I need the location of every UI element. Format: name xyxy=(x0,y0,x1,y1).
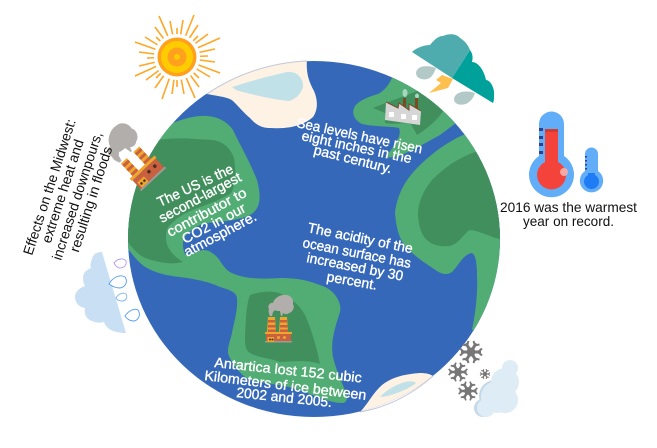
mercury xyxy=(584,173,599,189)
mercury xyxy=(537,129,566,189)
text: warmest year: year on record. xyxy=(523,213,614,229)
cloud dark half xyxy=(452,50,494,103)
factory base xyxy=(265,332,292,334)
chimneys xyxy=(403,98,418,109)
text: Midwest effects: increased downpours, xyxy=(49,130,105,262)
ticks xyxy=(585,156,587,170)
text: sea levels xyxy=(295,114,424,176)
snowflake 1 xyxy=(460,341,482,363)
cloud shadow xyxy=(474,380,511,417)
land: South America dark xyxy=(245,292,320,364)
ocean xyxy=(128,61,500,417)
text: ocean acidity: The acidity of the xyxy=(306,219,415,256)
raindrops xyxy=(416,66,475,105)
chimneys xyxy=(121,147,152,177)
thermometer body xyxy=(529,112,574,197)
smoke puffs xyxy=(402,89,408,97)
icon: rain cloud xyxy=(75,252,139,333)
land: Eurasia dark xyxy=(418,152,500,246)
icon: small thermometer xyxy=(580,148,603,192)
thermometer body xyxy=(580,148,603,192)
text: US contributor: The US is the xyxy=(155,160,236,210)
globe rim xyxy=(207,61,433,412)
land: Arctic light xyxy=(353,78,456,158)
text: Antartica ice: Kilometers of ice between xyxy=(204,367,367,403)
text: Midwest effects: extreme heat and xyxy=(38,137,87,245)
icon: large thermometer xyxy=(529,112,574,197)
sun rays xyxy=(135,15,220,99)
globe xyxy=(128,60,500,417)
ice lake: north xyxy=(232,72,303,101)
text: ocean acidity: increased by 30 xyxy=(305,249,405,284)
text: US contributor: CO2 in our xyxy=(179,199,249,247)
cloud light half xyxy=(412,34,470,78)
text: ocean acidity: percent. xyxy=(325,268,378,293)
sun disc xyxy=(158,38,196,76)
text: warmest year xyxy=(500,199,637,229)
text: Midwest effects: resulting in floods xyxy=(66,144,115,254)
text: Midwest effects xyxy=(20,117,115,262)
highlight xyxy=(560,168,568,176)
text: US contributor: contributor to xyxy=(164,184,249,240)
text: Antartica ice: Antartica lost 152 cubic xyxy=(214,354,363,385)
icon: storm cloud xyxy=(412,34,494,105)
text: sea levels: eight inches in the xyxy=(300,127,413,166)
text: warmest year: 2016 was the warmest xyxy=(500,199,637,215)
icon: factory in South America xyxy=(265,295,294,342)
icon: factory near Arctic xyxy=(385,89,421,125)
ice cap: south xyxy=(360,373,433,412)
icon: snow cloud and flakes xyxy=(449,341,519,417)
icon: factory in North America xyxy=(97,118,168,191)
smoke xyxy=(268,295,294,316)
text: Antartica ice: 2002 and 2005. xyxy=(236,384,333,410)
ray gap xyxy=(154,34,200,80)
text: US contributor: second-largest xyxy=(156,169,244,226)
land: Arctic dark xyxy=(373,90,443,135)
cloud xyxy=(75,252,126,333)
land: North America dark xyxy=(128,138,236,264)
raindrops xyxy=(109,259,139,321)
icon: sun xyxy=(135,15,220,99)
text: sea levels: Sea levels have risen xyxy=(295,114,424,157)
text: US contributor: atmosphere. xyxy=(181,208,259,260)
land: North America light xyxy=(115,116,347,403)
text: US contributor xyxy=(155,160,259,260)
smoke xyxy=(98,118,144,164)
text: ocean acidity xyxy=(301,219,415,293)
text: Antartica ice xyxy=(204,354,367,410)
text: Midwest effects: Effects on the Midwest: xyxy=(20,117,79,257)
text: ocean acidity: ocean surface has xyxy=(301,234,412,271)
chimneys xyxy=(267,317,288,332)
factory windows xyxy=(389,112,417,120)
snowflake 4 xyxy=(480,369,490,379)
continents and ice caps xyxy=(128,62,500,412)
lightning bolt xyxy=(429,75,453,93)
snowflake 3 xyxy=(459,382,477,400)
land: Eurasia light xyxy=(395,134,500,330)
ticks xyxy=(539,128,543,154)
ice lake: south xyxy=(380,381,416,397)
factory base xyxy=(130,156,157,181)
factory building xyxy=(385,102,421,125)
snowflake 2 xyxy=(449,363,467,381)
ice cap: north xyxy=(207,62,317,128)
cloud xyxy=(477,360,519,417)
text: sea levels: past century. xyxy=(312,141,394,176)
